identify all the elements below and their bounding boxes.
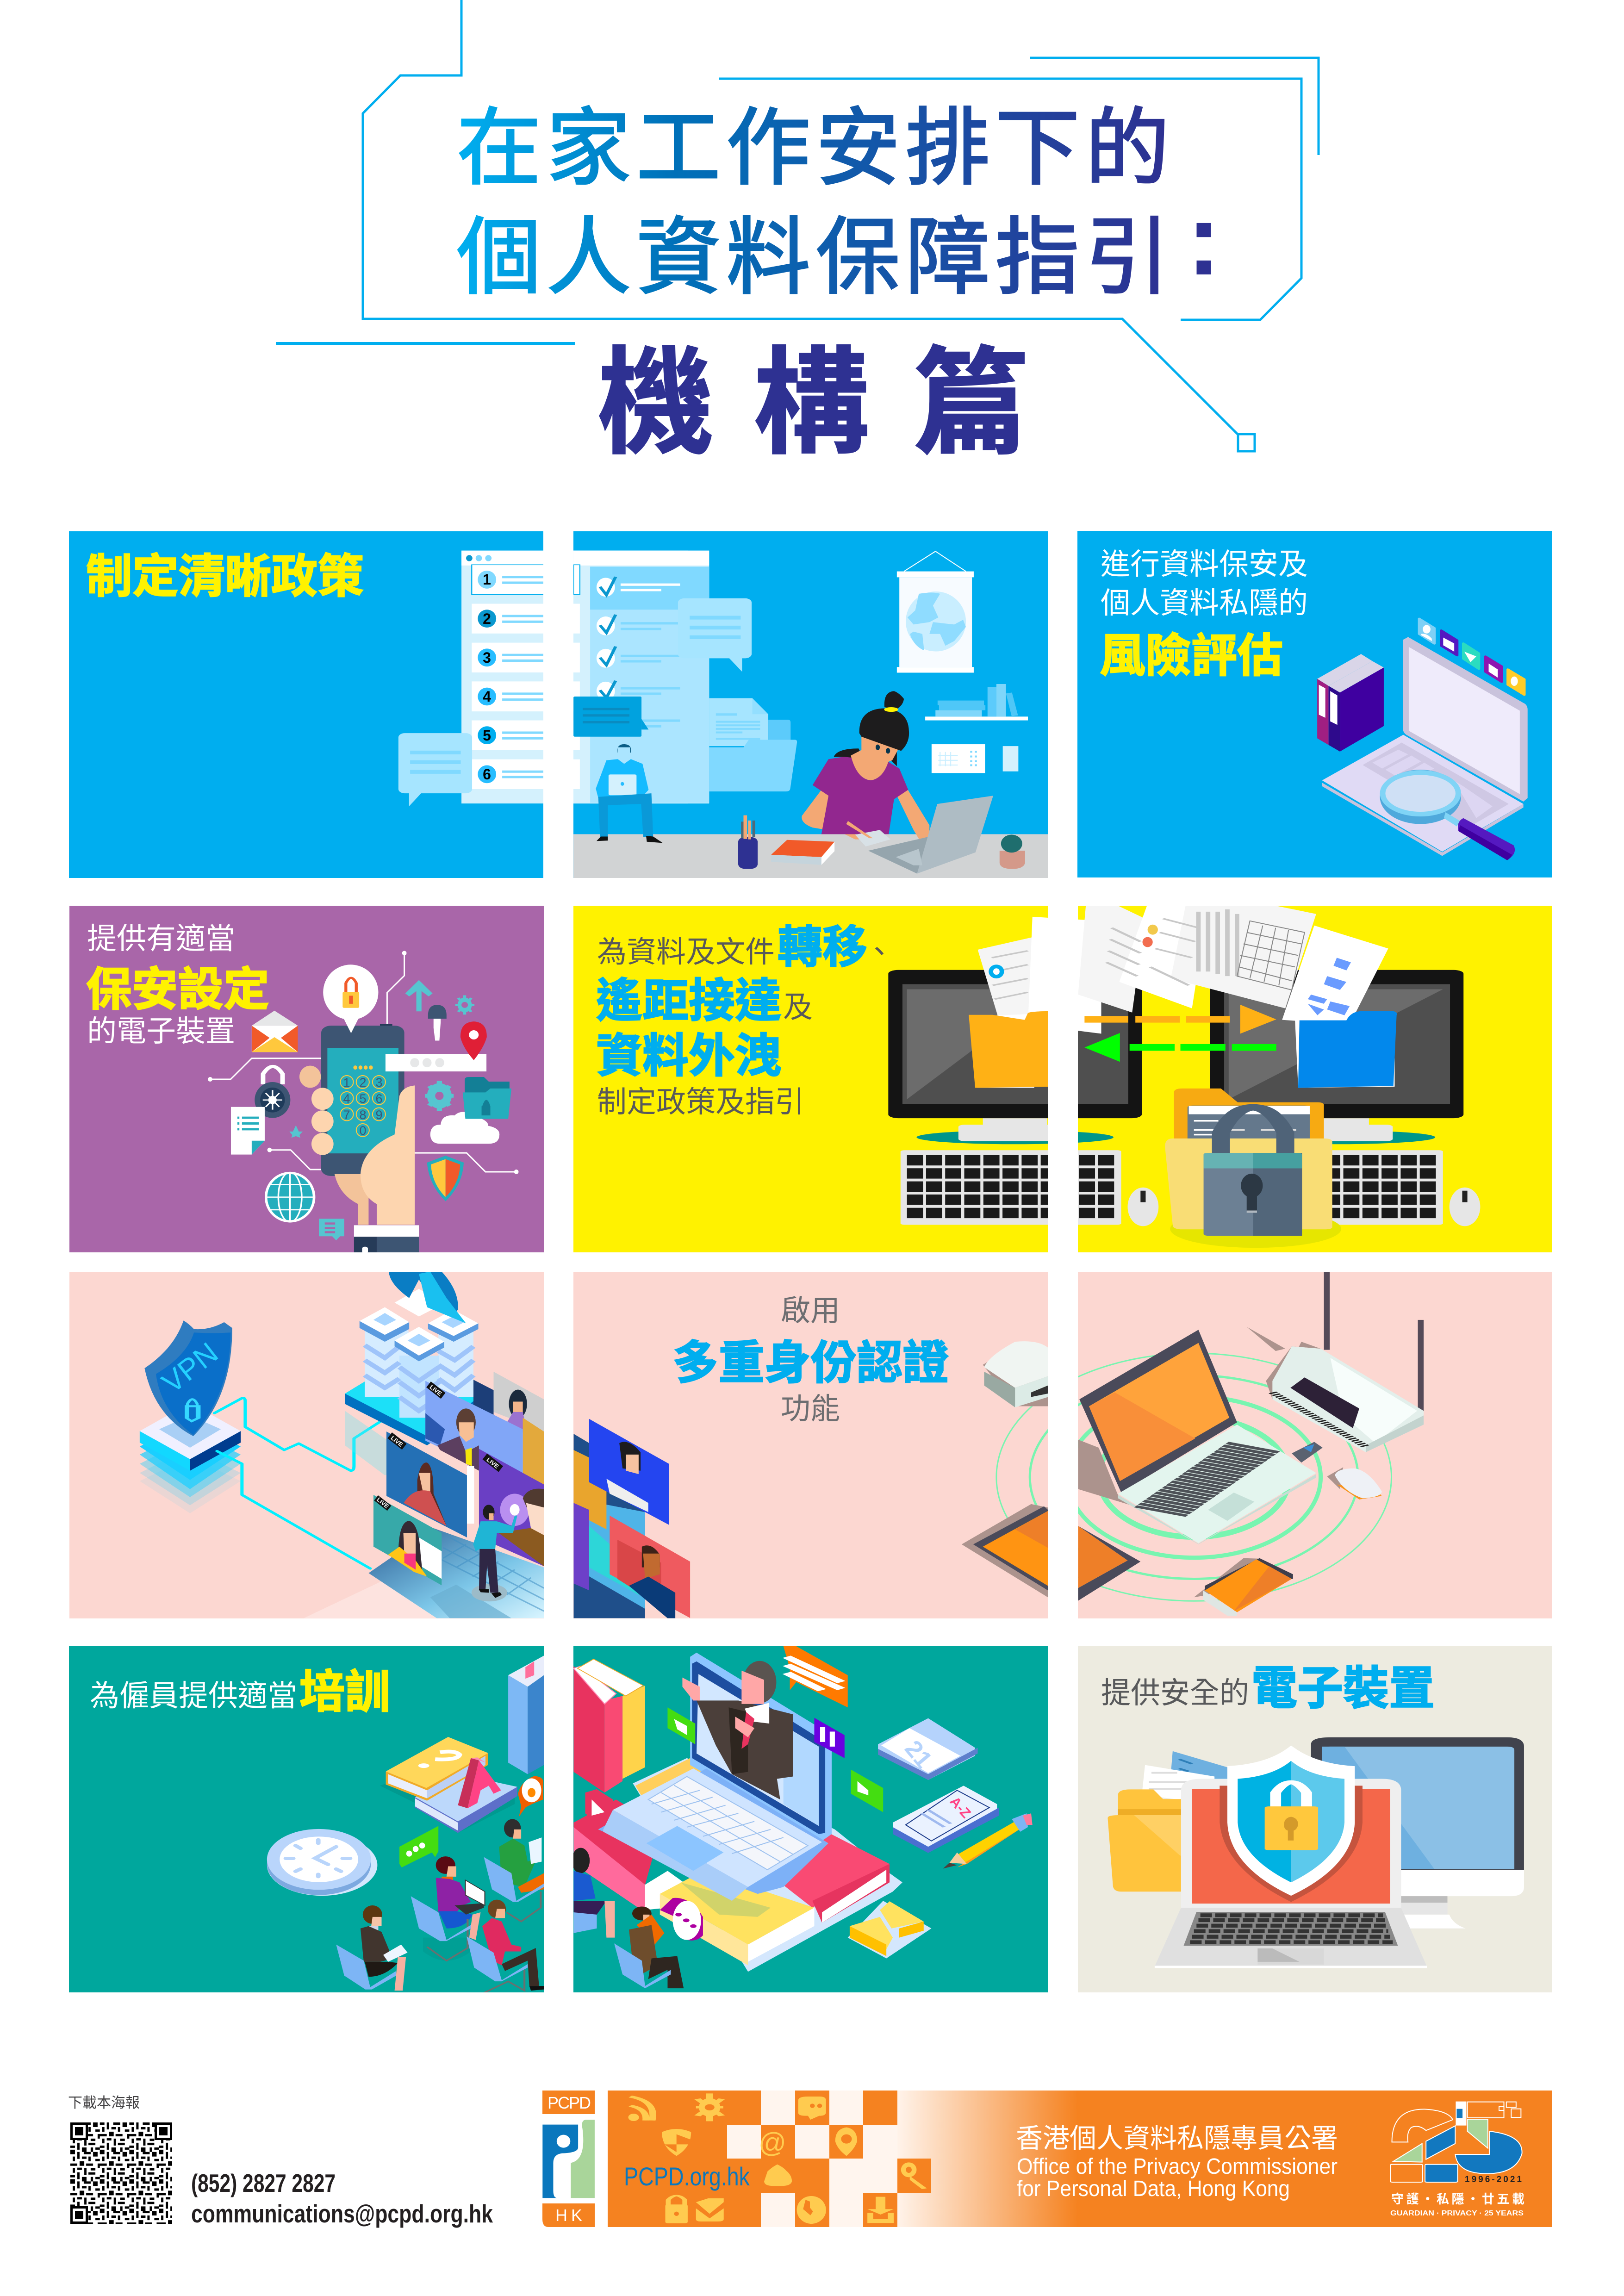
heading: transfer, remote access, data leakage: 遙距接達	[596, 975, 781, 1027]
footer: website: PCPD.org.hk	[624, 2162, 750, 2191]
list numbers: 5	[483, 727, 491, 744]
logo: 25th anniversary: 守護・私隱・廿五載	[1391, 2192, 1524, 2206]
heading: multi-factor authentication: 多重身份認證	[672, 1338, 949, 1389]
keypad digits: 6	[375, 1092, 383, 1106]
panel: multi-factor authentication	[573, 1272, 1048, 1618]
phone label: A-Z	[947, 1794, 974, 1821]
footer: organisation name: 香港個人資料私隱專員公署	[1016, 2123, 1338, 2153]
footer: organisation name: for Personal Data, Hong Kong	[1017, 2177, 1290, 2201]
title: two lines: 在家工作安排下的	[457, 101, 1170, 195]
logo: 25th anniversary	[1390, 2102, 1524, 2217]
heading: risk assessment: 個人資料私隱的	[1101, 586, 1308, 620]
illustration: training session with people, books and laptop	[267, 1646, 1033, 1993]
heading: staff training: 為僱員提供適當	[90, 1679, 297, 1712]
heading: security settings: 的電子裝置	[87, 1014, 235, 1048]
text: VPN on shield: VPN	[156, 1336, 224, 1400]
keypad digits: 4	[343, 1092, 350, 1106]
panel: clear policy continued	[573, 531, 1048, 878]
panel: staff training continued	[573, 1646, 1048, 1992]
panel: security settings	[69, 906, 544, 1252]
panel: multi-factor authentication continued	[1078, 1272, 1552, 1618]
heading: staff training: 培訓	[299, 1666, 390, 1717]
heading: multi-factor authentication: 功能	[781, 1392, 840, 1425]
title: two lines: 個人資料保障指引	[457, 210, 1170, 305]
heading: transfer, remote access, data leakage	[596, 922, 894, 1119]
list numbers: 1	[483, 571, 491, 588]
list numbers: 2	[483, 610, 491, 627]
heading: security settings: 保安設定	[86, 964, 269, 1015]
logo: 25th anniversary: GUARDIAN · PRIVACY · 25 YEARS	[1390, 2209, 1524, 2217]
illustration: secure computer with shield	[1108, 1737, 1524, 1968]
logo: 25th anniversary: 1996-2021	[1465, 2175, 1522, 2184]
footer: download label: 下載本海報	[68, 2095, 140, 2111]
keypad digits: 3	[375, 1076, 383, 1089]
keypad digits: 9	[375, 1108, 383, 1122]
panel: clear policy	[69, 531, 543, 878]
heading: secure devices	[1101, 1662, 1435, 1714]
heading: risk assessment	[1100, 548, 1308, 681]
heading: risk assessment: 進行資料保安及	[1101, 548, 1308, 581]
heading: multi-factor authentication: 啟用	[781, 1294, 840, 1327]
subtitle: 機構篇	[598, 339, 1028, 468]
footer banner	[608, 2091, 1552, 2227]
illustration: laptop, binders and magnifier	[1317, 619, 1528, 860]
panel: risk assessment	[1077, 531, 1552, 877]
panel: transfer policy continued	[1078, 906, 1552, 1252]
video call LIVE labels: LIVE	[390, 1434, 404, 1448]
footer: contact phone and email	[191, 2169, 493, 2228]
heading: secure devices: 提供安全的	[1101, 1676, 1249, 1710]
footer icons: @	[759, 2127, 786, 2158]
heading: transfer, remote access, data leakage: 及	[783, 990, 813, 1024]
video call LIVE labels: LIVE	[485, 1456, 500, 1470]
panel: secure devices	[1078, 1646, 1552, 1992]
illustration: numbered list and office worker	[398, 551, 1048, 879]
video call LIVE labels	[374, 1381, 503, 1511]
list numbers: 4	[483, 688, 491, 705]
keypad digits: 1	[343, 1076, 350, 1089]
heading: security settings	[86, 922, 269, 1048]
illustration: two computers exchanging files with padlock	[888, 906, 1480, 1248]
footer icons	[628, 2093, 927, 2224]
keypad digits: 7	[343, 1108, 350, 1122]
list numbers: 3	[483, 649, 491, 666]
calendar date: 21	[899, 1736, 937, 1773]
heading: transfer, remote access, data leakage: 制定政策及指引	[597, 1085, 804, 1119]
footer: organisation name	[1016, 2123, 1338, 2201]
heading: transfer, remote access, data leakage: 、	[865, 935, 894, 969]
heading: security settings: 提供有適當	[87, 922, 235, 955]
list numbers: 6	[483, 766, 491, 783]
illustration: VPN shield, servers, video conferencing laptop and wireless devices	[140, 1271, 1424, 1618]
logo: PCPD HK	[542, 2091, 595, 2227]
heading: transfer, remote access, data leakage: 資料外洩	[596, 1030, 781, 1082]
heading: multi-factor authentication	[672, 1294, 949, 1425]
heading: risk assessment: 風險評估	[1100, 630, 1283, 681]
footer: contact phone and email: communications@pcpd.org.hk	[191, 2199, 493, 2228]
keypad digits: 2	[359, 1076, 367, 1089]
panel: staff training	[69, 1646, 544, 1992]
title: two lines: :	[1187, 182, 1221, 296]
footer: contact phone and email: (852) 2827 2827	[191, 2169, 336, 2197]
keypad digits	[343, 1076, 383, 1138]
panel: transfer policy	[573, 906, 1048, 1252]
video call LIVE labels: LIVE	[429, 1383, 443, 1397]
video call LIVE labels: LIVE	[375, 1496, 390, 1510]
logo: PCPD HK: PCPD	[548, 2093, 591, 2112]
keypad digits: 5	[359, 1092, 367, 1106]
panel: VPN	[69, 1272, 544, 1618]
footer: organisation name: Office of the Privacy Commissioner	[1017, 2154, 1338, 2179]
keypad digits: 0	[359, 1124, 367, 1138]
logo: PCPD HK: HK	[555, 2206, 582, 2225]
title: two lines	[457, 101, 1221, 305]
keypad digits: 8	[359, 1108, 367, 1122]
header frame lines	[276, 0, 1319, 451]
heading: clear policy: 制定清晰政策	[86, 551, 364, 603]
footer: QR code	[70, 2122, 172, 2224]
illustration: phone in hand with security icons	[208, 951, 519, 1254]
list numbers	[483, 571, 491, 783]
heading: staff training	[90, 1666, 390, 1717]
heading: transfer, remote access, data leakage: 轉移	[778, 922, 867, 972]
heading: transfer, remote access, data leakage: 為資料及文件	[597, 935, 775, 969]
heading: secure devices: 電子裝置	[1251, 1662, 1435, 1714]
